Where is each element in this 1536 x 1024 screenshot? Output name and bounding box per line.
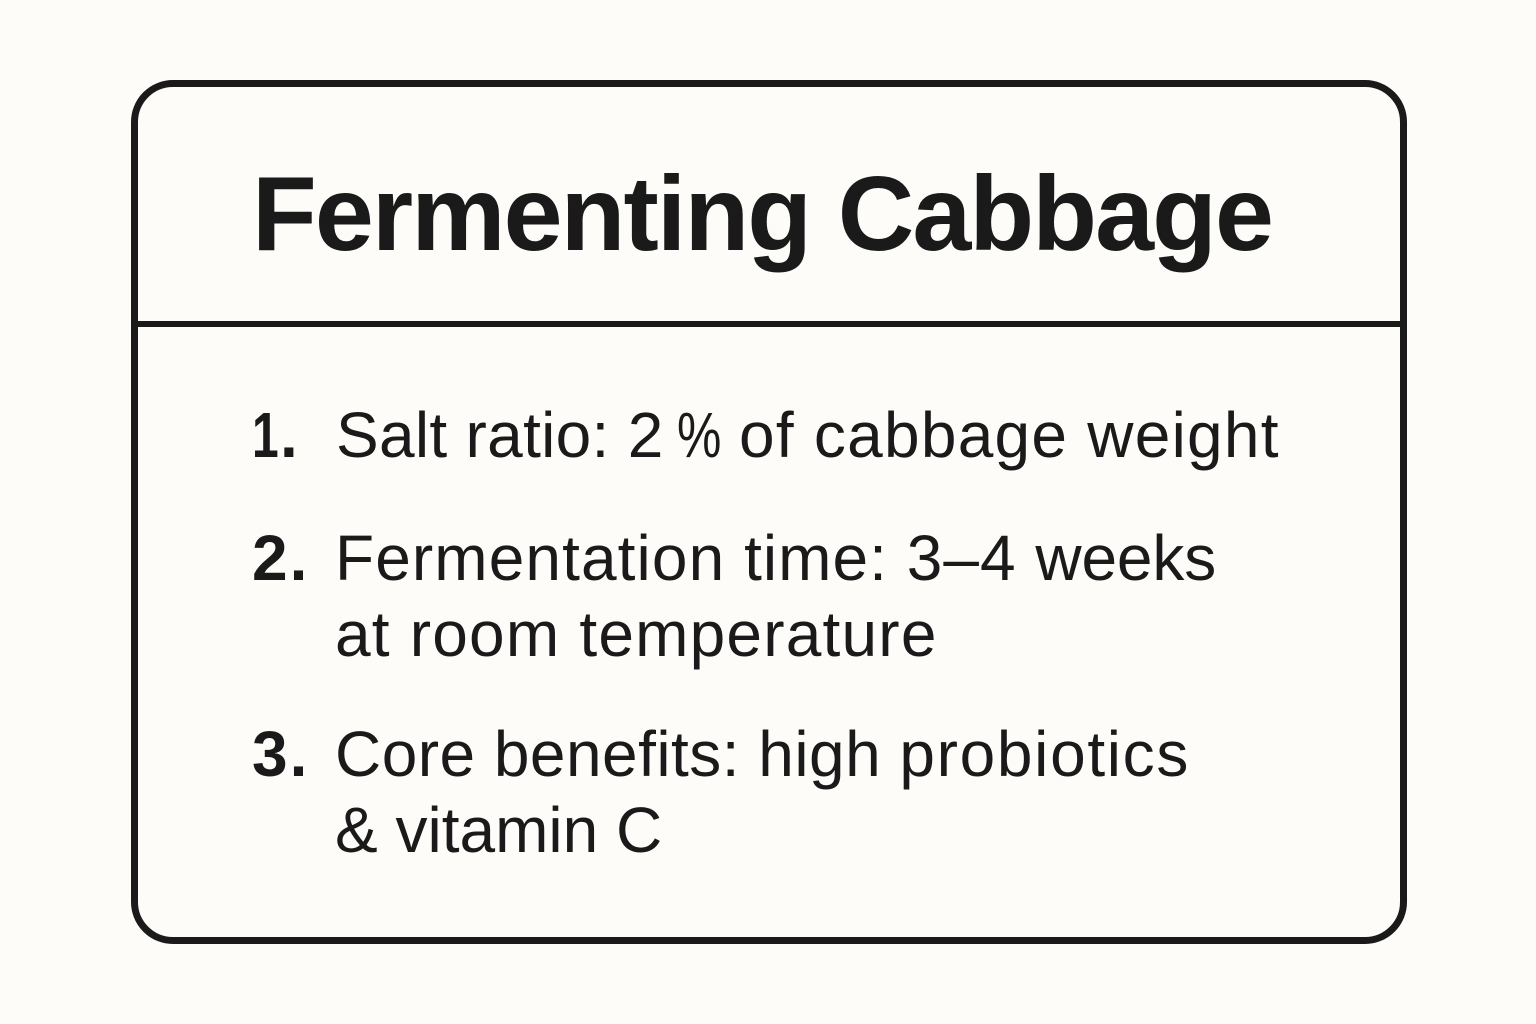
list item 3 text: Core benefits: high probiotics — [335, 718, 1190, 790]
list item 1 number: 1 — [252, 399, 279, 471]
list item 3 number: 3. — [252, 718, 309, 790]
list item 2 text: Fermentation time: 3–4 weeks — [335, 522, 1216, 594]
list item 2 text: at room temperature — [335, 598, 938, 670]
list item 2 number: 2. — [252, 522, 309, 594]
list item 1 number — [252, 399, 298, 471]
list item 2 text — [335, 522, 1216, 670]
divider under title — [135, 321, 1403, 327]
panel: fermenting cabbage card — [131, 80, 1407, 944]
list item 1 text — [336, 399, 1280, 471]
list item 1 text: of cabbage weight — [739, 399, 1280, 471]
list item 1 text: % — [677, 399, 721, 471]
list item 3 text: & vitamin C — [335, 794, 662, 866]
list item 1 number: . — [280, 399, 298, 471]
list item 3 text — [335, 718, 1190, 866]
list item 1 text: Salt ratio: 2 — [336, 399, 664, 471]
title: Fermenting Cabbage — [252, 155, 1272, 273]
